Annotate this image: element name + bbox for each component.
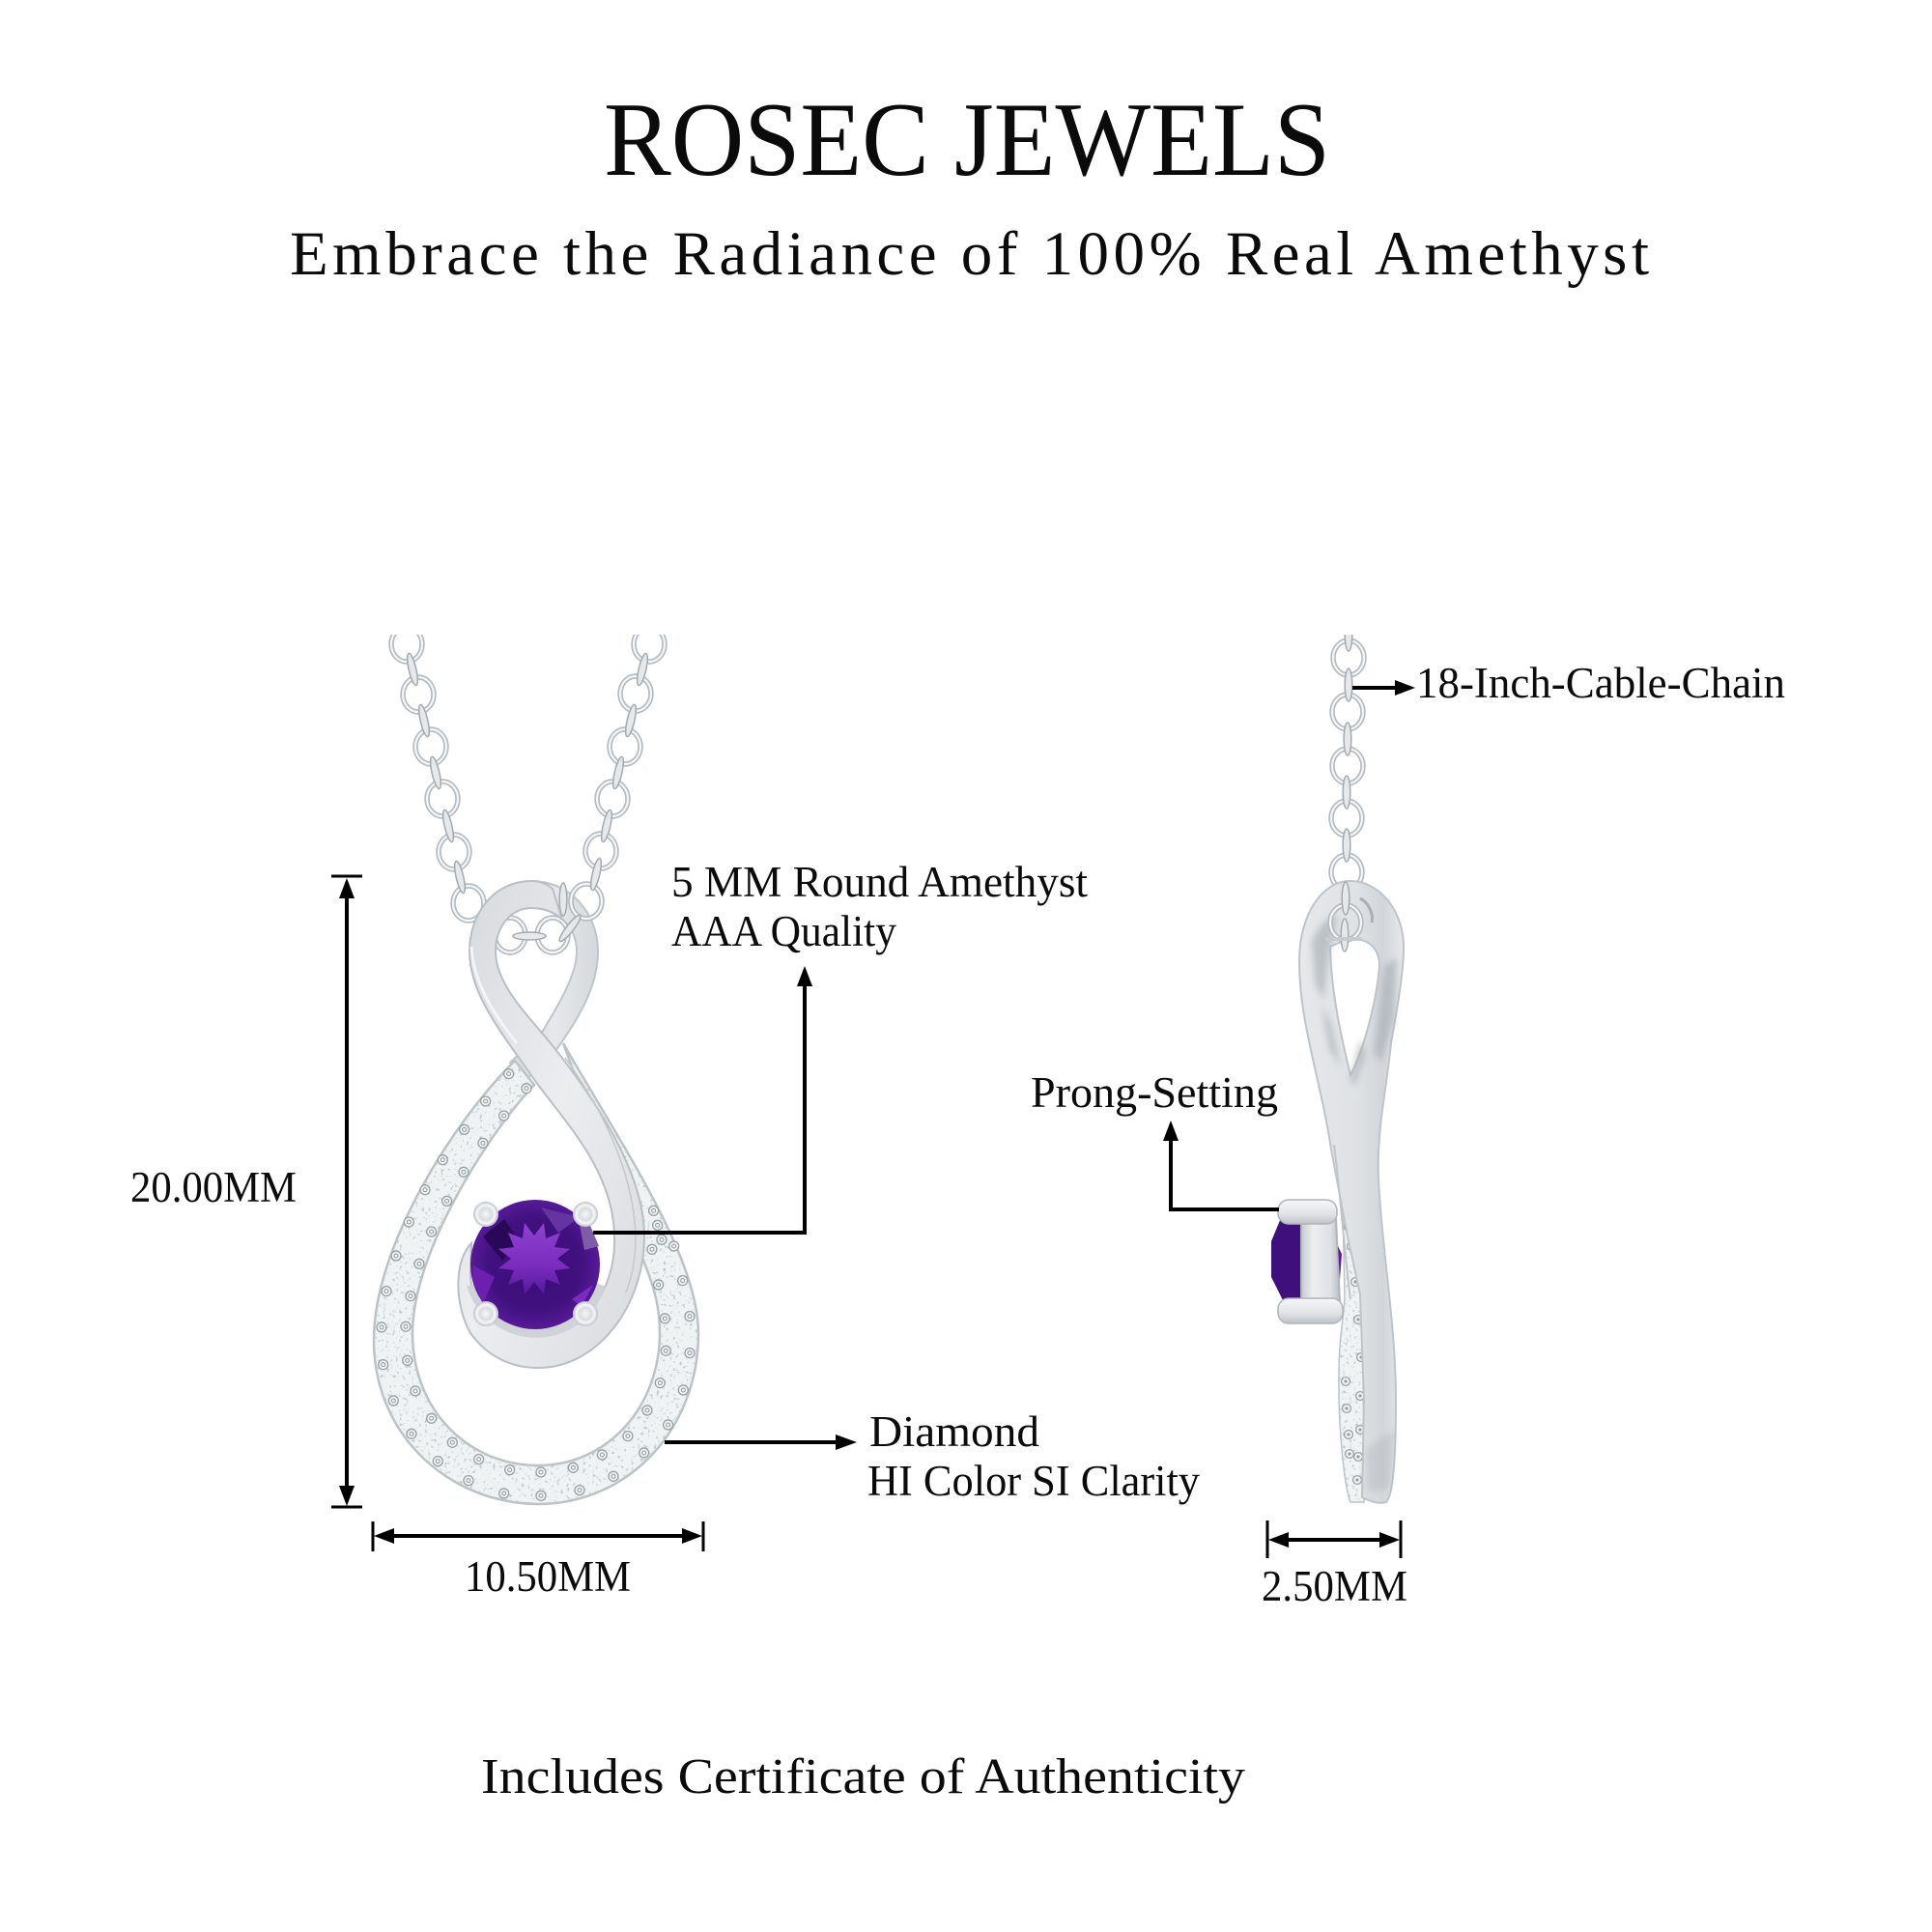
side stone sliver — [1338, 1246, 1342, 1280]
label: diamond: Diamond — [869, 1407, 1039, 1456]
diamond beads — [377, 1069, 695, 1500]
amethyst gemstone — [470, 1200, 600, 1329]
side ribbon soft shading — [1312, 916, 1397, 1492]
pavé diamond teardrop band — [374, 1043, 698, 1504]
arrow: 10.50MM width dimension — [373, 1521, 703, 1551]
side ribbon body — [1299, 881, 1404, 1503]
label: amethyst: AAA Quality — [671, 907, 896, 955]
prongs — [473, 1202, 598, 1326]
side basket — [1301, 1219, 1340, 1302]
label: diamond: HI Color SI Clarity — [867, 1457, 1200, 1505]
side strand edge line — [1334, 1145, 1350, 1299]
label: amethyst: 5 MM Round Amethyst — [671, 858, 1088, 906]
gem star facet — [498, 1223, 570, 1294]
label: 10.50MM: 10.50MM — [465, 1552, 631, 1601]
title: ROSEC JEWELS — [604, 81, 1330, 198]
ribbon shading — [471, 947, 636, 1333]
label: chain: 18-Inch-Cable-Chain — [1416, 659, 1785, 707]
connector rings at bail — [495, 883, 568, 952]
front view pendant — [374, 627, 698, 1504]
footer note: Includes Certificate of Authenticity — [481, 1749, 1245, 1804]
label: 2.50MM: 2.50MM — [1262, 1562, 1407, 1610]
side chain — [1331, 618, 1364, 890]
front chain: left strand — [391, 627, 484, 921]
side amethyst gemstone — [1271, 1213, 1303, 1303]
main ribbon strand — [458, 881, 644, 1368]
label: 20.00MM: 20.00MM — [130, 1163, 297, 1211]
front chain: right strand — [585, 627, 665, 868]
arrow: diamond callout — [665, 1435, 857, 1450]
side prongs — [1278, 1200, 1343, 1323]
label: diamond — [867, 1407, 1200, 1505]
arrow: amethyst callout — [593, 966, 812, 1233]
front chain last right ring — [557, 858, 604, 944]
side diamond strip — [1339, 1205, 1365, 1502]
arrow: prong setting callout — [1163, 1121, 1279, 1209]
subtitle: Embrace the Radiance of 100% Real Amethyst — [290, 219, 1649, 289]
arrow: chain callout — [1352, 680, 1415, 696]
side view pendant — [1271, 618, 1404, 1503]
arrow: 2.50MM depth dimension — [1267, 1520, 1401, 1558]
label: prong setting: Prong-Setting — [1031, 1068, 1278, 1117]
side bail hardware — [1325, 882, 1372, 952]
label: amethyst — [671, 858, 1088, 955]
arrow: 20.00MM height dimension — [331, 876, 362, 1507]
pendant back strand of bail — [510, 881, 598, 1079]
